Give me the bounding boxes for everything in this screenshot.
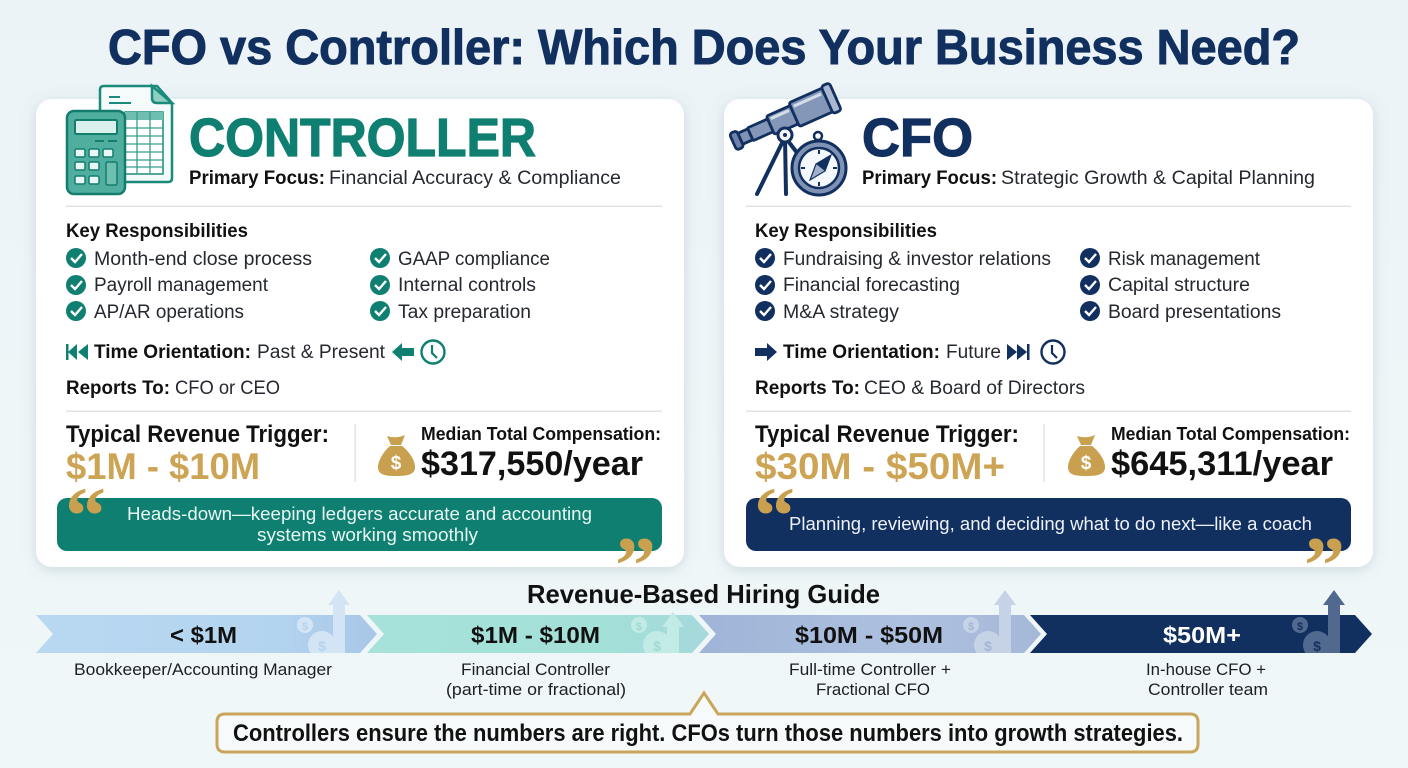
responsibilities list: Internal controls [398, 275, 536, 296]
responsibilities list: Financial forecasting [783, 275, 960, 296]
compensation [378, 424, 661, 483]
callout: Controllers ensure the numbers are right. CFOs turn those numbers into growth strategies. [233, 720, 1183, 747]
responsibilities list [755, 248, 1281, 323]
responsibilities list: Payroll management [94, 275, 269, 296]
key responsibilities heading: Key Responsibilities [66, 221, 248, 242]
primary focus: Primary Focus: [862, 168, 997, 189]
responsibilities list: Tax preparation [398, 302, 531, 323]
reports to: CFO or CEO [175, 378, 280, 399]
panel: controller [36, 86, 684, 611]
stage: $10M to $50M: $ [968, 621, 974, 633]
responsibilities list: Risk management [1108, 249, 1261, 270]
responsibilities list: Fundraising & investor relations [783, 249, 1051, 270]
responsibilities list: M&A strategy [783, 302, 900, 323]
quote: controller: systems working smoothly [257, 525, 478, 545]
stage: $50M+: $50M+ [1163, 622, 1241, 648]
compensation: $317,550/year [421, 445, 643, 483]
reports to: CEO & Board of Directors [864, 378, 1085, 399]
time orientation [755, 340, 1064, 364]
quote: cfo [746, 470, 1351, 611]
compensation [1068, 424, 1350, 483]
icon: calculator and spreadsheet [67, 86, 172, 194]
responsibilities list: Capital structure [1108, 275, 1250, 296]
heading: controller: CONTROLLER [189, 108, 536, 168]
time orientation: Past & Present [257, 342, 386, 363]
icon: money bag: $ [1081, 453, 1092, 474]
caption: $1M to $10M [446, 660, 626, 699]
key responsibilities heading: Key Responsibilities [755, 221, 937, 242]
heading: cfo: CFO [862, 108, 973, 168]
primary focus: Financial Accuracy & Compliance [329, 168, 621, 189]
stage: $1M to $10M: $ [653, 638, 661, 654]
revenue trigger: Typical Revenue Trigger: [66, 421, 329, 448]
responsibilities list [66, 248, 550, 323]
stage: $1M to $10M: $ [636, 621, 642, 633]
stage: $50M+: $ [1297, 621, 1303, 633]
stage: under $1M: < $1M [170, 622, 237, 648]
stage: $10M to $50M: $ [984, 638, 992, 654]
primary focus: Primary Focus: [189, 168, 325, 189]
reports to: Reports To: [66, 378, 170, 399]
primary focus [862, 168, 1315, 189]
compensation: $645,311/year [1111, 445, 1333, 483]
reports to [755, 378, 1085, 399]
caption: $1M to $10M: (part-time or fractional) [446, 680, 626, 699]
quote: cfo: ” [1304, 520, 1345, 611]
caption: $50M+: In-house CFO + [1146, 660, 1266, 679]
callout [217, 693, 1198, 752]
responsibilities list: Board presentations [1108, 302, 1281, 323]
primary focus: Strategic Growth & Capital Planning [1001, 168, 1315, 189]
stage: under $1M: $ [318, 638, 326, 654]
panel: cfo [724, 83, 1373, 611]
stage: $10M to $50M: $10M - $50M [795, 622, 943, 648]
reports to: Reports To: [755, 378, 860, 399]
chevron timeline [36, 590, 1372, 659]
time orientation: Time Orientation: [783, 342, 940, 363]
stage: under $1M: $ [302, 621, 308, 633]
icon: money bag: $ [391, 453, 402, 474]
icon: money bag [1068, 435, 1105, 476]
caption: under $1M: Bookkeeper/Accounting Manager [74, 660, 332, 679]
caption: $10M to $50M: Fractional CFO [816, 680, 930, 699]
responsibilities list: AP/AR operations [94, 302, 244, 323]
heading: revenue-based hiring guide: Revenue-Based Hiring Guide [527, 579, 880, 609]
quote: cfo: “ [754, 470, 795, 561]
compensation: Median Total Compensation: [1111, 424, 1350, 444]
time orientation: Time Orientation: [94, 342, 251, 363]
stage: under $1M [36, 590, 377, 659]
stage: $1M to $10M [367, 612, 709, 653]
revenue trigger [755, 421, 1019, 487]
revenue trigger: $30M - $50M+ [755, 446, 1005, 487]
stage: $50M+: $ [1313, 638, 1321, 654]
icon: telescope and compass [727, 83, 846, 195]
reports to [66, 378, 280, 399]
caption: $1M to $10M: Financial Controller [461, 660, 610, 679]
icon: money bag [378, 435, 415, 476]
compensation: Median Total Compensation: [421, 424, 661, 444]
responsibilities list: Month-end close process [94, 249, 312, 270]
revenue trigger: $1M - $10M [66, 446, 260, 487]
quote: cfo: Planning, reviewing, and deciding what to do next—like a coach [789, 514, 1312, 534]
time orientation [66, 340, 444, 364]
title: CFO vs Controller: Which Does Your Business Need? [108, 21, 1300, 75]
revenue trigger [66, 421, 329, 487]
quote: controller: ” [615, 520, 656, 611]
quote: controller: Heads-down—keeping ledgers accurate and accounting [127, 504, 592, 524]
time orientation: Future [946, 342, 1001, 363]
caption: $50M+: Controller team [1148, 680, 1268, 699]
caption: $50M+ [1146, 660, 1268, 699]
quote: controller [57, 470, 662, 611]
responsibilities list: GAAP compliance [398, 249, 550, 270]
stage: $50M+ [1030, 590, 1372, 659]
stage: $1M to $10M: $1M - $10M [471, 622, 600, 648]
quote: controller: “ [65, 470, 106, 561]
stage: $10M to $50M [699, 590, 1041, 659]
revenue trigger: Typical Revenue Trigger: [755, 421, 1019, 448]
caption: $10M to $50M [789, 660, 951, 699]
caption: $10M to $50M: Full-time Controller + [789, 660, 951, 679]
primary focus [189, 168, 621, 189]
